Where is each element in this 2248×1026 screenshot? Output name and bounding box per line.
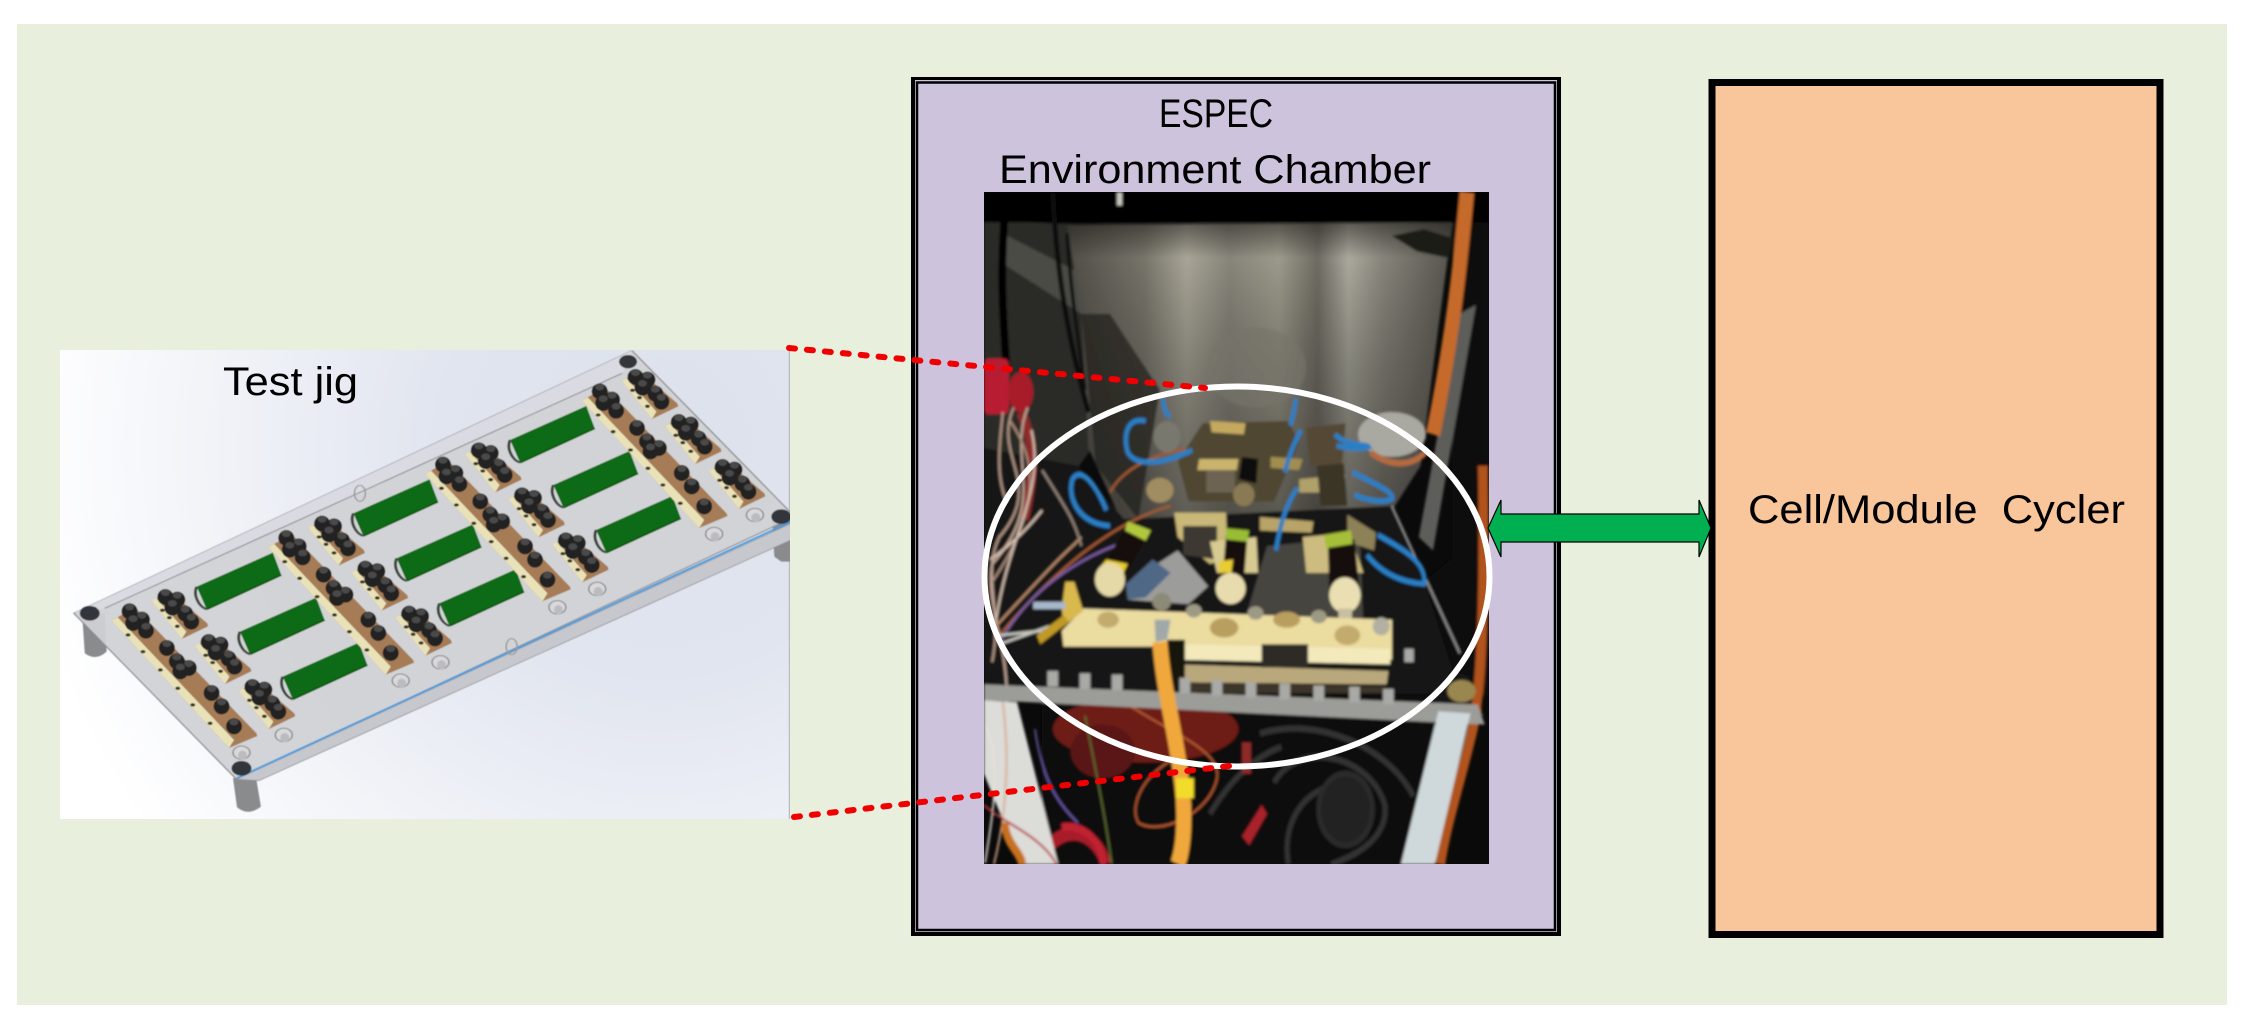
heading: ESPEC: ESPEC (1159, 92, 1273, 136)
white ellipse highlighting the jig (984, 386, 1490, 766)
orange cables (1433, 192, 1467, 434)
blue sense wires (1071, 399, 1424, 584)
heading: Test jig: Test jig (223, 360, 358, 404)
red cable tips (1242, 742, 1267, 845)
grey card (1126, 551, 1208, 604)
double-headed arrow (1488, 500, 1711, 557)
dashed zoom line: top (789, 348, 1205, 388)
label: Cell/Module Cycler: Cell/Module Cycler (1748, 488, 2125, 532)
green cells (195, 406, 681, 699)
red and orange wiring (1035, 696, 1238, 864)
black cylinders (1095, 521, 1361, 622)
heading: Environment Chamber: Environment Chamber (999, 148, 1431, 192)
upper brass blocks (1146, 421, 1376, 573)
brass bus bar (1033, 582, 1392, 693)
right side (1453, 222, 1488, 696)
transparent plate (74, 351, 795, 781)
red connector (984, 359, 1033, 414)
legs (82, 517, 792, 812)
panel: ESPEC environment chamber (911, 77, 1561, 936)
image edge line (788, 351, 790, 819)
acrylic plate edge and bolts (984, 649, 1485, 725)
black cable coils (1210, 728, 1413, 864)
panel: cell/module cycler (1712, 82, 2160, 934)
top black band (984, 192, 1488, 222)
orange-yellow power cable (1155, 620, 1194, 864)
copper terminal blocks (112, 369, 765, 748)
dark under-plate area (1042, 693, 1435, 864)
screws under blocks (233, 508, 763, 760)
white standoffs (984, 700, 1471, 864)
photo: test rig inside the chamber (984, 192, 1489, 864)
stainless back wall (1067, 222, 1453, 519)
thermocouple wires lower left (984, 702, 1103, 864)
thermocouple wire bundle (990, 408, 1192, 707)
upper left panel (984, 220, 1090, 467)
black cables (1002, 192, 1006, 367)
panel: test jig CAD image (60, 350, 795, 819)
CAD drawing of the jig (74, 351, 795, 812)
dashed zoom line: bottom (794, 766, 1229, 817)
dark jig surface (984, 448, 1485, 716)
